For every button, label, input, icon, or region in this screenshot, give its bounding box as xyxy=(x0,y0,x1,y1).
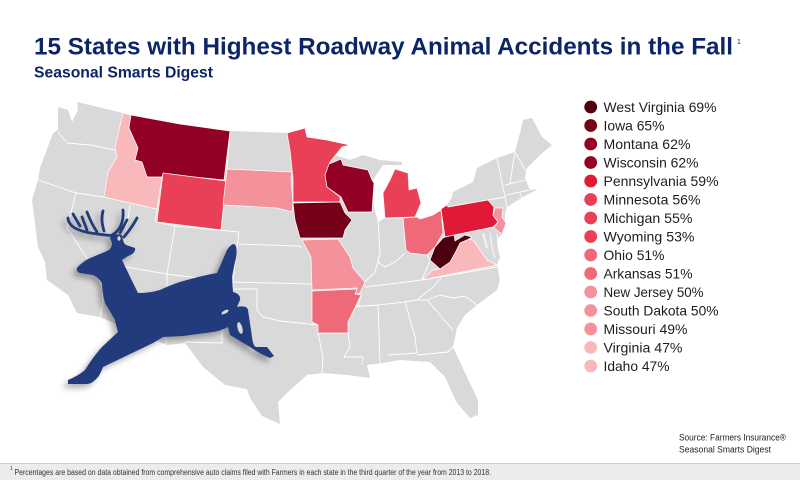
state: Missouri xyxy=(302,239,365,294)
footnote bar xyxy=(0,463,800,480)
legend: Idaho: Idaho 47% xyxy=(604,358,670,374)
legend: Montana: Montana 62% xyxy=(604,136,690,152)
legend: Minnesota: Minnesota 56% xyxy=(604,192,700,208)
legend: Missouri: Missouri 49% xyxy=(604,321,688,337)
US map xyxy=(32,102,552,424)
state borders xyxy=(38,131,530,373)
legend: Ohio: Ohio 51% xyxy=(604,247,664,263)
title: 15 States with Highest Roadway Animal Accidents in the Fall xyxy=(34,34,733,60)
state: Montana xyxy=(129,115,230,180)
legend: West Virginia: West Virginia 69% xyxy=(604,99,716,115)
legend: Michigan: Michigan 55% xyxy=(604,210,692,226)
state: Wyoming xyxy=(157,173,226,230)
source note xyxy=(679,432,786,454)
state: Virginia xyxy=(422,239,497,280)
legend: Arkansas: Arkansas 51% xyxy=(604,266,692,282)
legend: Pennsylvania: Pennsylvania 59% xyxy=(604,173,718,189)
footnote bar: Percentages are based on data obtained from comprehensive auto claims filed with Farmers in each state in the third quarter of the year from 2013 to 2018. xyxy=(14,468,491,477)
footnote bar: 1 xyxy=(10,466,13,472)
state: Pennsylvania xyxy=(441,200,498,237)
legend: Wisconsin: Wisconsin 62% xyxy=(604,154,698,170)
legend: Wyoming: Wyoming 53% xyxy=(604,228,694,244)
state: Arkansas xyxy=(312,289,361,333)
source note: Seasonal Smarts Digest xyxy=(679,444,771,454)
state: Iowa xyxy=(293,202,352,238)
state: New Jersey xyxy=(493,208,506,234)
legend: South Dakota: South Dakota 50% xyxy=(604,302,718,318)
state: South Dakota xyxy=(223,169,293,212)
legend: New Jersey: New Jersey 50% xyxy=(604,284,704,300)
state: Michigan xyxy=(383,169,421,218)
state: West Virginia xyxy=(430,234,472,269)
legend xyxy=(584,99,718,374)
title: 1 xyxy=(737,39,741,46)
icon: leaping deer xyxy=(68,210,274,384)
legend: Iowa: Iowa 65% xyxy=(604,118,664,134)
state: Ohio xyxy=(403,210,443,255)
legend: Virginia: Virginia 47% xyxy=(604,340,682,356)
highlighted states xyxy=(104,113,506,333)
state: Minnesota xyxy=(287,128,350,202)
source note: Source: Farmers Insurance® xyxy=(679,432,786,442)
state: Wisconsin xyxy=(325,159,374,212)
map base: grey states xyxy=(32,102,552,424)
subtitle: Seasonal Smarts Digest xyxy=(34,65,214,82)
state: Idaho xyxy=(104,113,162,209)
